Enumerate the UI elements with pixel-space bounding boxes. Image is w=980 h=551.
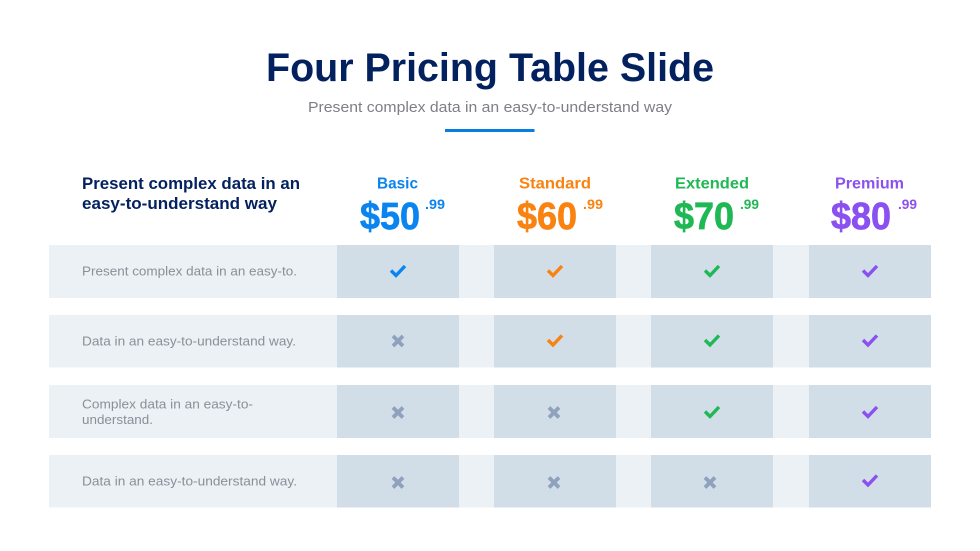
plan header: Extended: Extended — [675, 176, 749, 192]
row 4: only Premium included — [49, 455, 931, 508]
row 4: only Premium included: Data in an easy-to-understand way. — [82, 474, 297, 488]
plan header: Basic: Basic — [377, 176, 418, 192]
row 3: Basic and Standard excluded — [49, 385, 931, 438]
plan header: Standard — [517, 176, 603, 238]
row 3: Basic and Standard excluded: Complex data in an easy-to- — [82, 396, 253, 412]
table heading: Present complex data in an — [82, 175, 300, 193]
plan header: Basic — [360, 176, 445, 238]
plan header: Extended — [674, 176, 759, 238]
plan header: Premium: $80 — [831, 196, 891, 238]
plan header: Premium: .99 — [898, 196, 917, 212]
plan header: Basic: .99 — [425, 196, 445, 212]
row 1: all plans included: Present complex data in an easy-to. — [82, 264, 297, 278]
title: Four Pricing Table Slide — [266, 46, 714, 90]
table heading: easy-to-understand way — [82, 195, 278, 213]
row 2: Basic excluded — [49, 315, 931, 368]
plan header: Extended: .99 — [740, 196, 759, 212]
title underline accent — [445, 129, 534, 132]
plan header: Premium — [831, 176, 917, 238]
plan header: Standard: .99 — [583, 196, 603, 212]
row 3: Basic and Standard excluded: understand. — [82, 412, 153, 427]
plan header: Premium: Premium — [835, 176, 904, 192]
row 2: Basic excluded: Data in an easy-to-understand way. — [82, 334, 296, 348]
plan header: Extended: $70 — [674, 196, 734, 238]
subtitle: Present complex data in an easy-to-understand way — [308, 99, 673, 116]
table heading — [82, 175, 300, 213]
plan header: Standard: $60 — [517, 196, 577, 238]
plan header: Basic: $50 — [360, 196, 420, 238]
plan header: Standard: Standard — [519, 176, 591, 192]
row 1: all plans included — [49, 245, 931, 298]
